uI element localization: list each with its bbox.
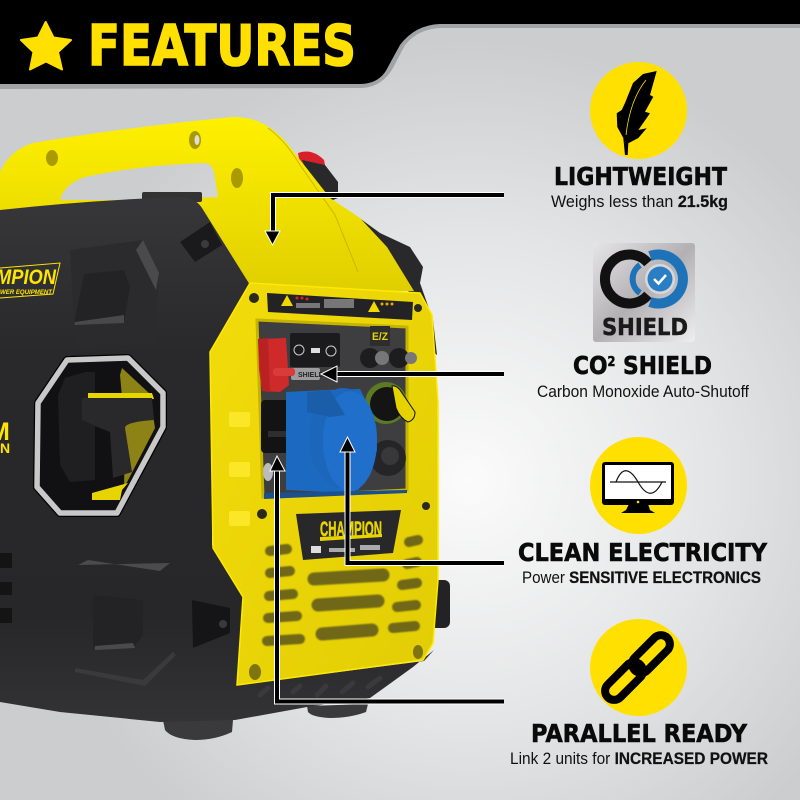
pull start window: [37, 358, 163, 513]
arrow: CO shield: [321, 366, 504, 382]
black body: [0, 197, 434, 722]
banner shape: [0, 0, 800, 84]
arrow: clean electricity: [340, 437, 504, 563]
left Champion logo: [0, 263, 60, 298]
icon: shield badge: [593, 243, 695, 342]
arrow: lightweight: [265, 195, 504, 245]
selector dial: [365, 382, 415, 424]
feature: clean electricity: [518, 437, 768, 587]
knobs: [360, 348, 417, 368]
arrow: parallel ready: [270, 456, 504, 702]
description: Weighs less than 21.5kg: [551, 193, 728, 211]
heading: CLEAN ELECTRICITY: [518, 538, 768, 567]
Champion plate: CHAMPION: [320, 518, 382, 541]
black outlet: [261, 400, 295, 453]
description: Carbon Monoxide Auto-Shutoff: [537, 383, 749, 401]
heading: CO: [573, 351, 613, 380]
cropped side logo letters: N: [0, 440, 10, 456]
handle seam: [268, 128, 358, 272]
yellow interior: [120, 368, 155, 488]
rear black housing: [302, 160, 437, 355]
header banner: [0, 0, 800, 89]
panel corner screws: [249, 293, 430, 680]
starter handle: [82, 398, 154, 478]
red outlet: [258, 338, 295, 392]
warning label strip: [267, 293, 413, 320]
heading: PARALLEL READY: [531, 719, 748, 748]
Champion plate: [296, 510, 401, 560]
handle screws: [46, 131, 243, 188]
red button: [298, 152, 326, 170]
lower round socket: [370, 440, 406, 476]
icon: star: [21, 22, 71, 70]
heading: 2: [608, 355, 615, 370]
interior panel: [58, 372, 95, 482]
banner shadow: [0, 24, 800, 89]
heading: SHIELD: [615, 351, 712, 380]
icon: chain link: [590, 619, 687, 716]
EZ start badge: [370, 326, 390, 346]
shield tag: [291, 368, 324, 380]
icon: feather: [590, 62, 687, 159]
shield tag: SHIELD: [298, 372, 324, 379]
title: FEATURES: [88, 14, 356, 79]
side bumps: [229, 412, 250, 526]
left Champion logo: WER EQUIPMENT: [0, 290, 53, 296]
meter dial: [263, 463, 273, 481]
inner outlet panel: [257, 320, 407, 497]
status display: [290, 333, 340, 367]
icon: monitor: [590, 437, 687, 534]
icon: shield badge: SHIELD: [602, 315, 688, 341]
fuel cap: [142, 192, 202, 202]
vents: [267, 540, 418, 641]
blue outlet: [286, 388, 377, 493]
description: Link 2 units for INCREASED POWER: [510, 750, 768, 768]
feature: CO2 shield: [537, 243, 749, 401]
heading: LIGHTWEIGHT: [554, 162, 727, 191]
feature: lightweight: [551, 62, 728, 211]
body facets: [0, 222, 230, 686]
blue dust strip: [264, 490, 407, 499]
description: Power SENSITIVE ELECTRONICS: [522, 569, 761, 587]
generator feet: [163, 580, 450, 740]
EZ start badge: E/Z: [372, 331, 388, 343]
underside slots: [260, 678, 380, 695]
carry handle: [0, 117, 414, 291]
feature: parallel ready: [510, 619, 768, 768]
yellow control panel face: [210, 283, 438, 685]
generator: [0, 117, 450, 740]
